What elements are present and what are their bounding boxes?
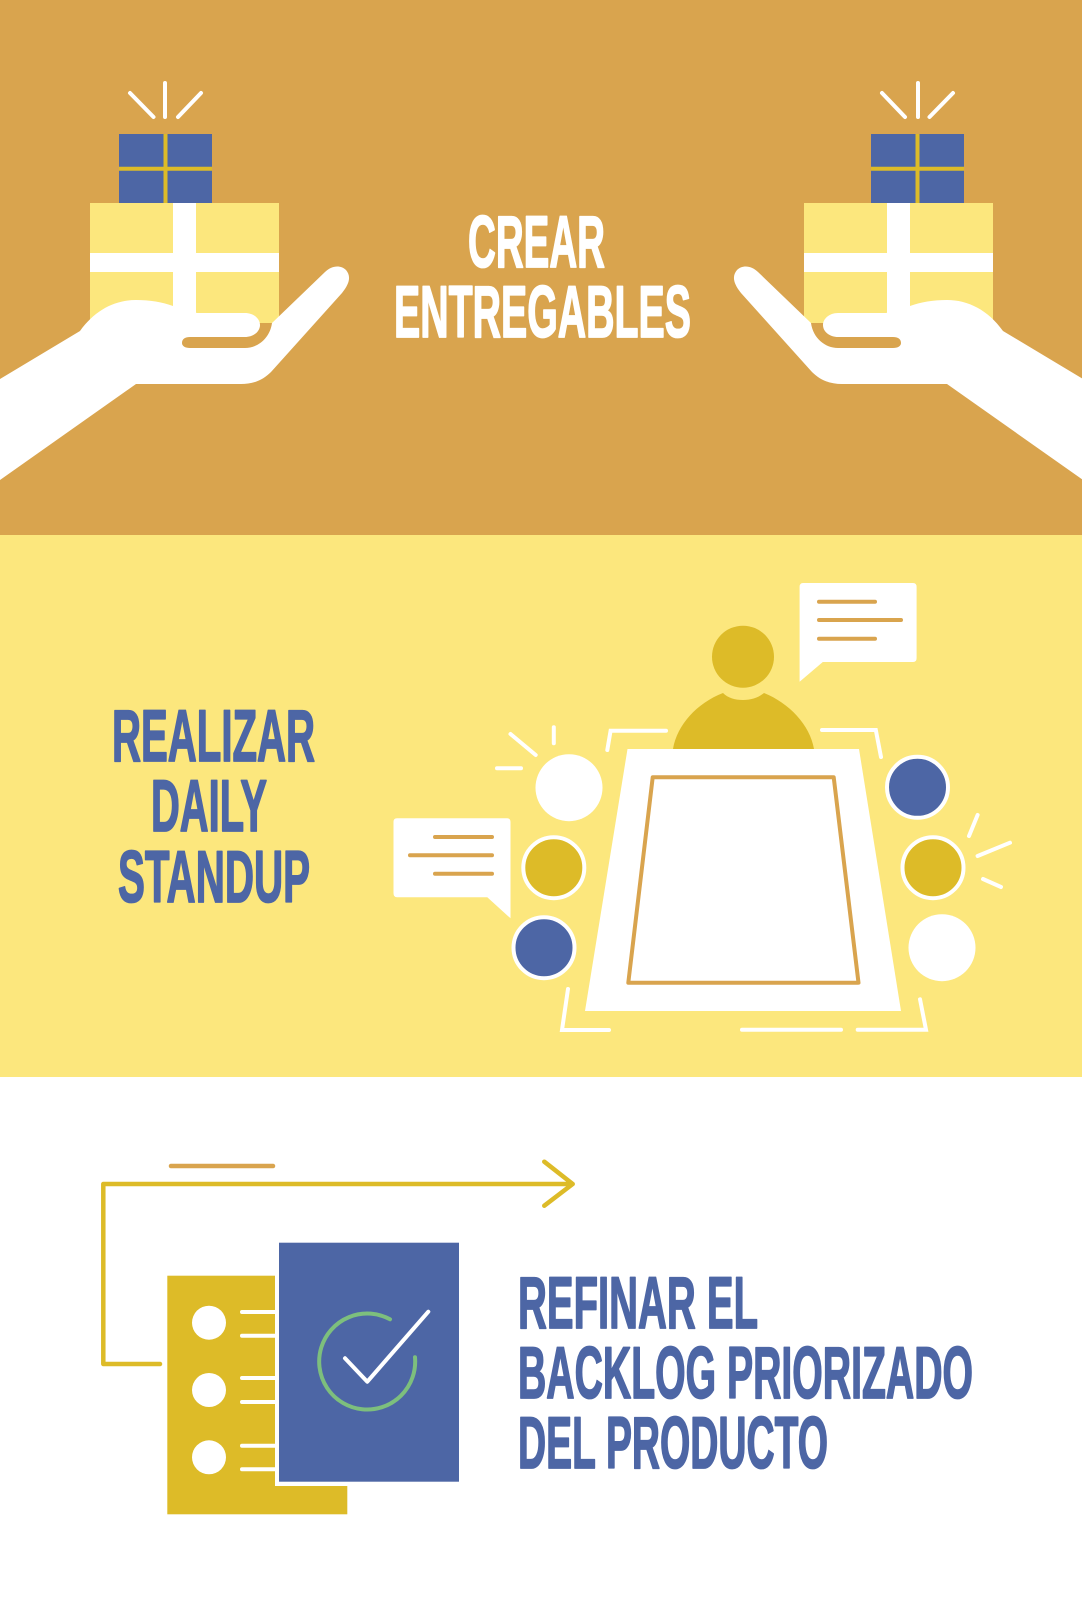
heading: realizar daily standup: REALIZAR: [112, 696, 315, 777]
icon: left hand holding gifts: [0, 83, 349, 480]
icon: attendee white left: [536, 754, 602, 821]
icon: sparkle lines right: [882, 83, 953, 117]
icon: blue gift: [119, 134, 212, 203]
icon: orange accent line: [171, 1164, 273, 1168]
icon: top speech bubble: [800, 583, 917, 682]
icon: left speech bubble: [394, 818, 510, 918]
icon: right hand holding gifts: [734, 83, 1082, 480]
heading: realizar daily standup: DAILY: [151, 766, 267, 847]
icon: right sparkle lines: [969, 815, 1010, 887]
icon: checked blue document: [275, 1243, 459, 1486]
icon: person at head of table: [673, 626, 814, 749]
icon: yellow gift: [90, 203, 279, 323]
heading: realizar daily standup: STANDUP: [118, 837, 310, 918]
heading: refinar el backlog priorizado del producto: DEL PRODUCTO: [518, 1403, 828, 1484]
heading: refinar el backlog priorizado del producto: [518, 1263, 973, 1484]
icon: meeting table illustration: [394, 583, 1010, 1030]
icon: attendee white right: [908, 914, 976, 981]
panel: crear entregables: [0, 0, 1082, 535]
icon: attendee gold right: [902, 837, 964, 898]
icon: backlog list document: [167, 1276, 347, 1514]
arrow: process arrow: [103, 1162, 573, 1364]
heading: refinar el backlog priorizado del producto: REFINAR EL: [518, 1263, 758, 1344]
icon: table: [585, 749, 901, 1011]
heading: crear entregables: ENTREGABLES: [394, 272, 691, 353]
heading: crear entregables: CREAR: [468, 202, 605, 283]
icon: blue gift right: [871, 134, 964, 203]
icon: right hand: [734, 266, 1082, 480]
heading: realizar daily standup: [112, 696, 315, 918]
panel: refinar el backlog: [0, 1077, 1082, 1614]
heading: crear entregables: [394, 202, 691, 353]
icon: left hand: [0, 266, 349, 480]
icon: attendee blue left: [514, 917, 574, 978]
icon: left sparkle lines: [497, 727, 554, 768]
panel: realizar daily standup: [0, 535, 1082, 1077]
icon: corner brackets: [562, 730, 926, 1030]
icon: yellow gift right: [804, 203, 993, 323]
icon: attendee blue right: [887, 757, 948, 818]
icon: attendee gold left: [523, 837, 584, 898]
icon: sparkle lines: [130, 83, 201, 117]
